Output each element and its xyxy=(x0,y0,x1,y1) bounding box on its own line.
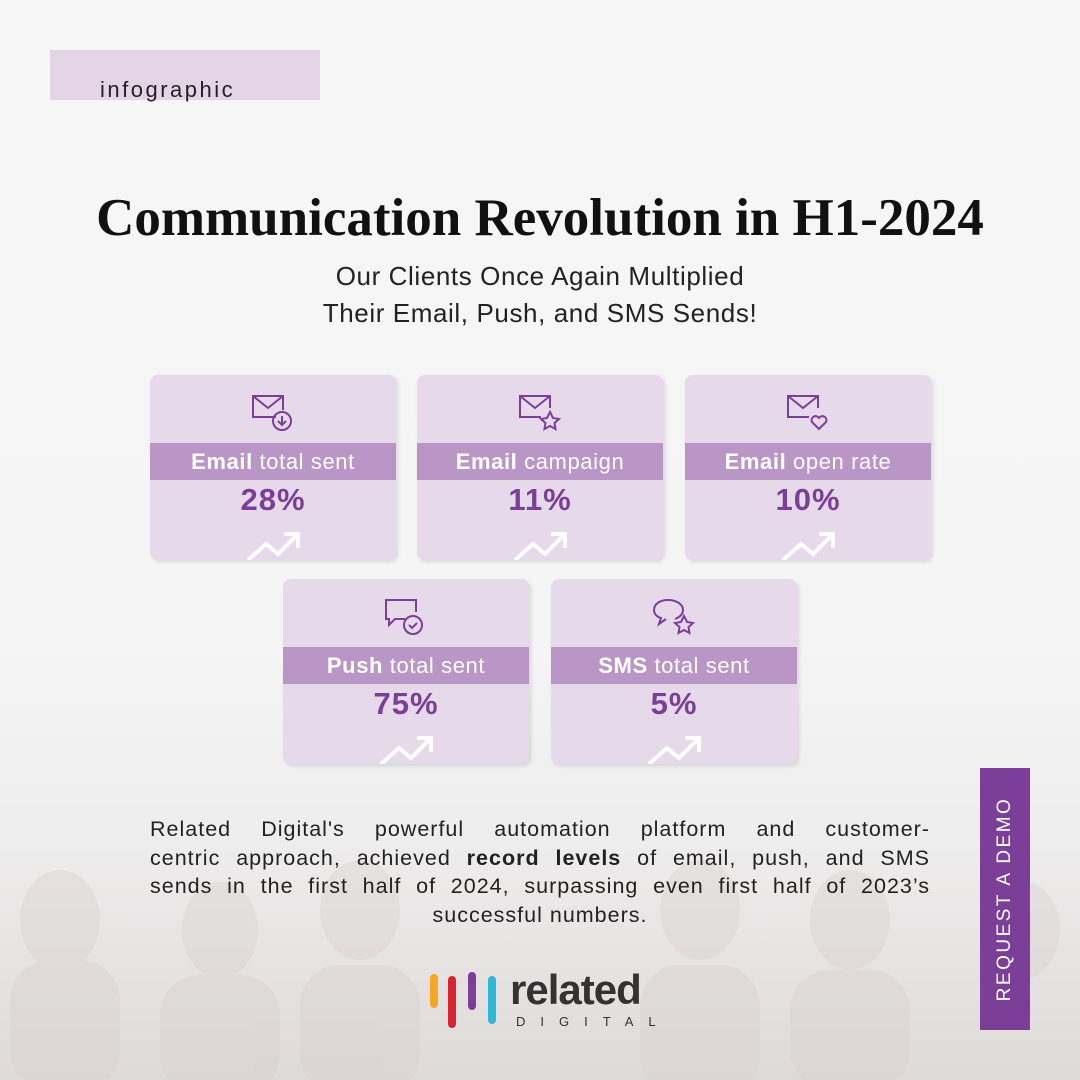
icon: trend arrow xyxy=(380,736,433,764)
card: email open rate: Email open rate xyxy=(725,449,891,474)
card: email total sent xyxy=(150,375,396,560)
card: sms total sent: SMS total sent xyxy=(598,653,750,678)
card: email open rate: 10% xyxy=(775,482,841,517)
logo: related digital: DIGITAL xyxy=(516,1014,671,1029)
button: request a demo: REQUEST A DEMO xyxy=(994,797,1015,1001)
subtitle: Their Email, Push, and SMS Sends! xyxy=(323,298,757,328)
icon: envelope download xyxy=(252,395,292,431)
card: email campaign: 11% xyxy=(508,482,572,517)
card: email campaign xyxy=(417,375,663,560)
body text xyxy=(150,817,930,926)
background people photo (faded) xyxy=(18,860,1060,978)
icon: trend arrow xyxy=(514,532,567,560)
card: push total sent: Push total sent xyxy=(327,653,485,678)
icon: envelope star xyxy=(519,395,562,431)
body text: centric approach, achieved record levels of email, push, and SMS xyxy=(150,846,930,870)
icon: envelope heart xyxy=(787,395,828,430)
card: email open rate xyxy=(685,375,931,560)
card: email total sent: Email total sent xyxy=(191,449,355,474)
icon: speech bubble star xyxy=(653,599,696,635)
card: email campaign: Email campaign xyxy=(456,449,624,474)
button: request a demo xyxy=(980,768,1030,1030)
icon: trend arrow xyxy=(246,532,300,560)
card: sms total sent xyxy=(551,579,797,764)
card: sms total sent: 5% xyxy=(651,686,697,721)
logo: related digital xyxy=(430,966,671,1029)
icon: trend arrow xyxy=(648,736,701,764)
subtitle: Our Clients Once Again Multiplied xyxy=(336,261,744,291)
icon: trend arrow xyxy=(782,532,835,560)
subtitle xyxy=(323,261,757,328)
body text: sends in the first half of 2024, surpassing even first half of 2023’s xyxy=(150,874,930,898)
body text: Related Digital's powerful automation platform and customer- xyxy=(150,817,930,841)
title: Communication Revolution in H1-2024 xyxy=(96,189,984,247)
icon: chat check xyxy=(385,599,423,635)
card: push total sent xyxy=(283,579,529,764)
logo: related digital: related xyxy=(510,966,641,1013)
card: email total sent: 28% xyxy=(240,482,306,517)
tag: infographic xyxy=(50,50,320,100)
card: push total sent: 75% xyxy=(373,686,439,721)
tag: infographic: infographic xyxy=(100,77,235,102)
body text: successful numbers. xyxy=(433,902,647,926)
